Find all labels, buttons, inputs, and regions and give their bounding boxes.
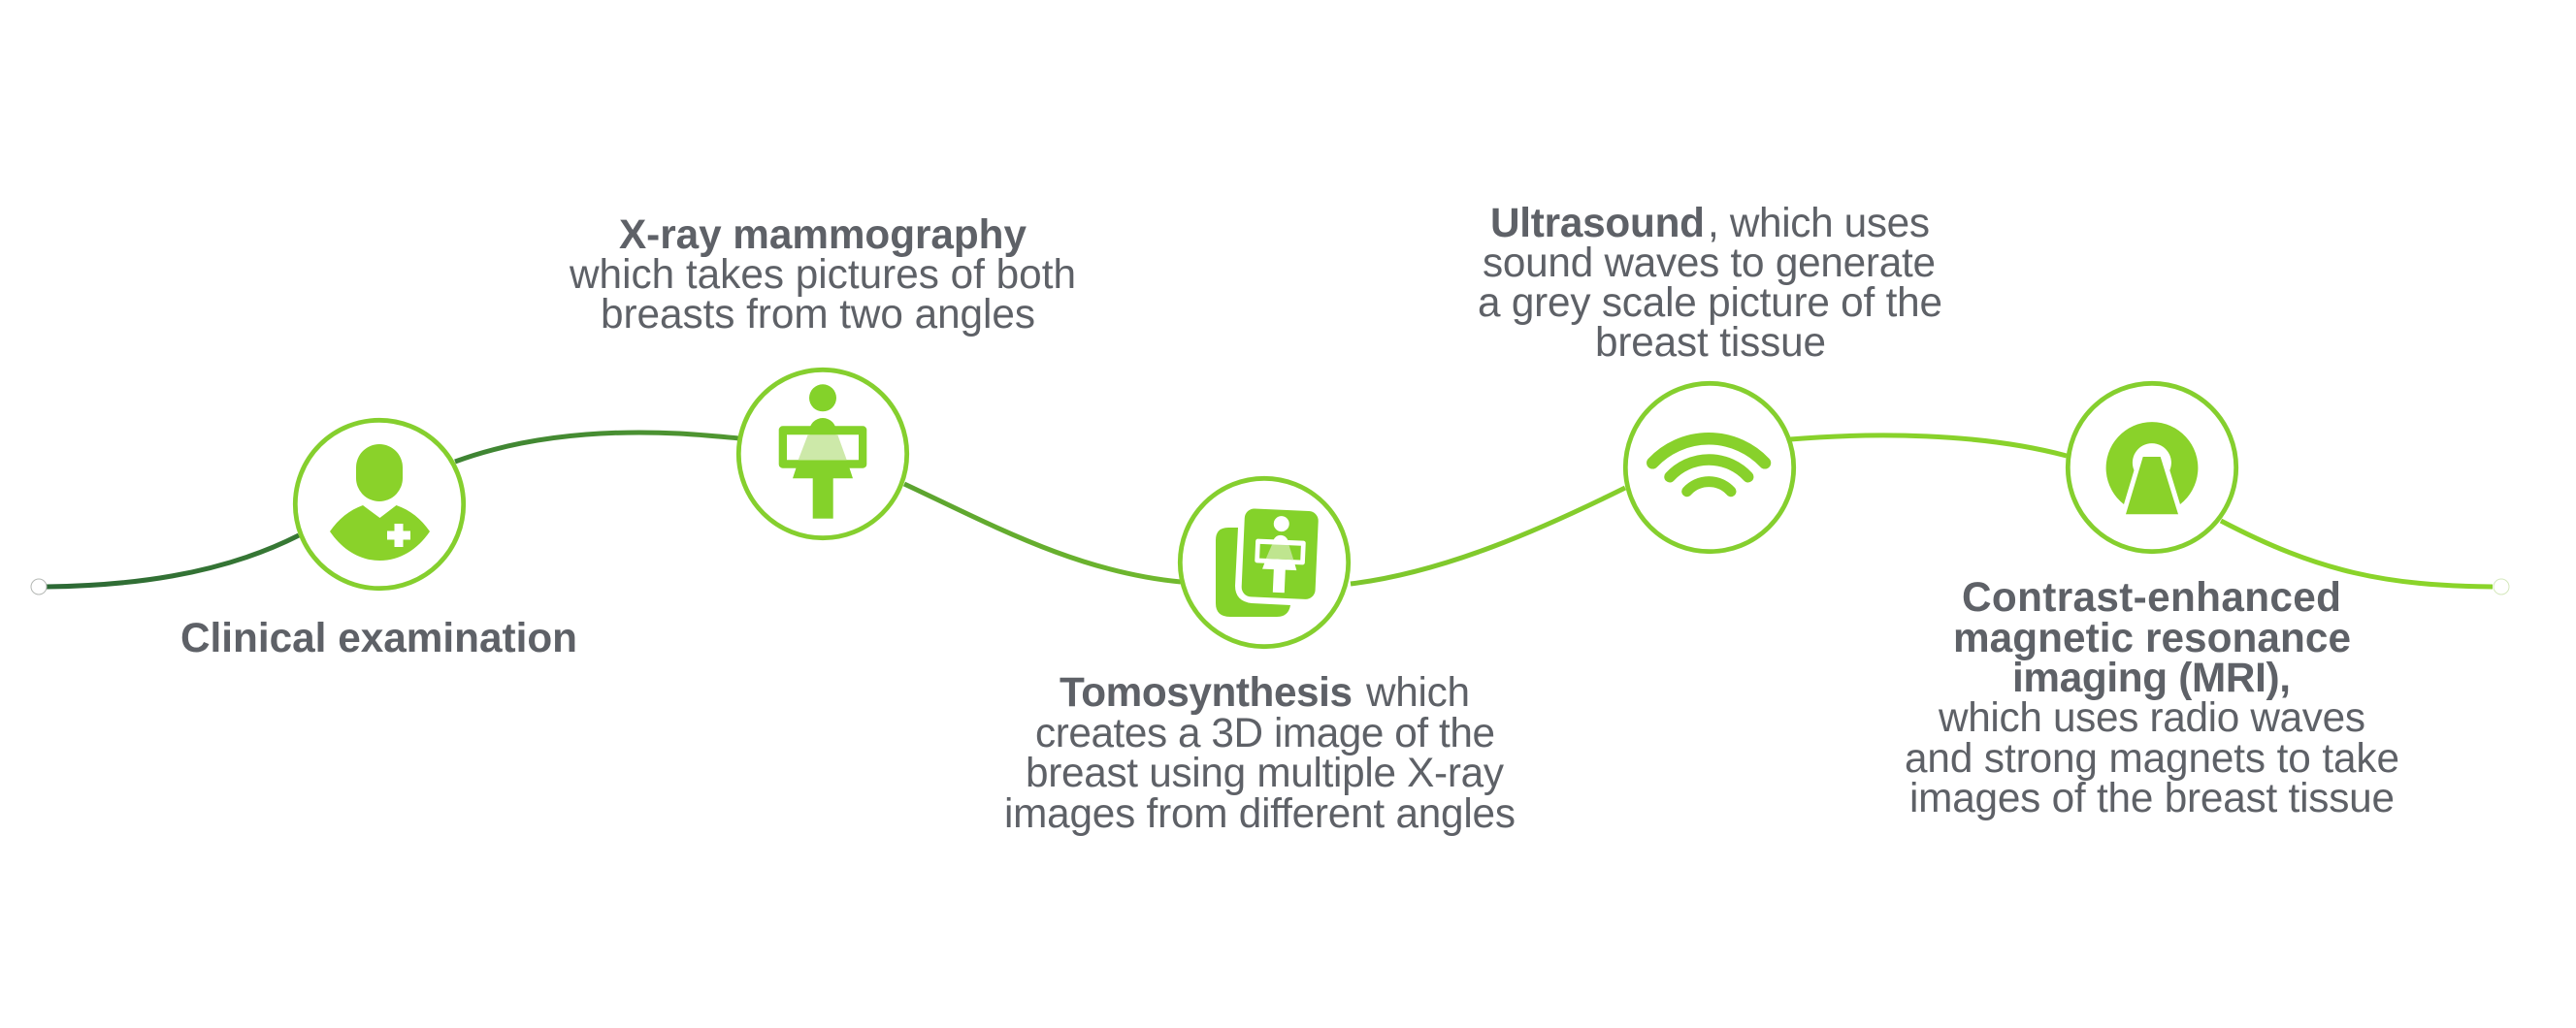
text: ultrasound: sound waves to generate (1483, 240, 1936, 285)
text: contrast-enhanced MRI: and strong magnets to take (1905, 735, 2399, 781)
text: ultrasound: a grey scale picture of the (1478, 279, 1942, 325)
text: contrast-enhanced MRI: which uses radio waves (1938, 694, 2365, 740)
label: clinical examination: Clinical examination (180, 615, 577, 660)
end marker (2494, 579, 2509, 594)
connector: timeline curve (47, 433, 2493, 587)
text: contrast-enhanced MRI: imaging (MRI), (2012, 655, 2291, 700)
icon: stacked x-ray images (1180, 478, 1349, 647)
text: tomosynthesis: images from different angles (1004, 790, 1516, 836)
text: tomosynthesis: which (1365, 669, 1470, 715)
text: ultrasound: , which uses (1708, 200, 1930, 245)
text: tomosynthesis: Tomosynthesis (1060, 669, 1353, 715)
text: x-ray mammography: X-ray mammography (619, 211, 1027, 257)
icon: mammography machine (738, 369, 907, 538)
text: x-ray mammography: which takes pictures of both (569, 251, 1076, 297)
step 4: ultrasound (1478, 200, 1954, 552)
step 1: clinical examination (180, 420, 577, 660)
text: contrast-enhanced MRI: magnetic resonance (1953, 615, 2351, 660)
text: contrast-enhanced MRI: Contrast-enhanced (1962, 574, 2341, 620)
text: tomosynthesis: breast using multiple X-ray (1026, 750, 1505, 795)
text: x-ray mammography: breasts from two angles (601, 291, 1035, 337)
text: contrast-enhanced MRI: images of the breast tissue (1909, 775, 2395, 820)
text: tomosynthesis: creates a 3D image of the (1035, 710, 1495, 755)
step 3: tomosynthesis (1004, 478, 1516, 836)
icon: MRI scanner (2068, 383, 2236, 552)
step 2: x-ray mammography (569, 211, 1088, 538)
icon: clinician (295, 420, 464, 589)
icon: sound waves (1625, 383, 1794, 552)
step 5: contrast-enhanced MRI (1905, 383, 2411, 820)
start marker (31, 579, 47, 594)
text: ultrasound: Ultrasound (1490, 200, 1705, 245)
text: ultrasound: breast tissue (1595, 319, 1826, 365)
